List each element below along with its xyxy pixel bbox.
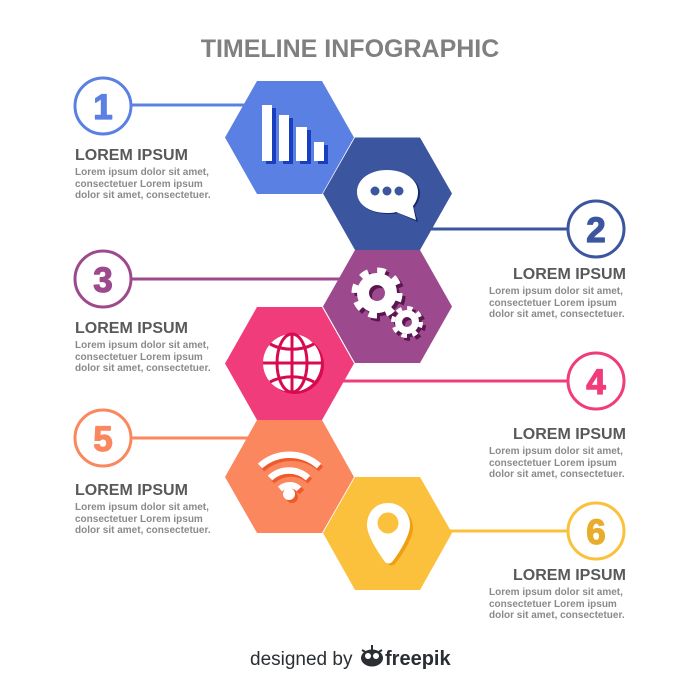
footer credit: designed by	[250, 649, 353, 670]
hexagon 2 with speech bubble icon	[323, 138, 452, 250]
text block 2: dolor sit amet, consectetuer.	[489, 309, 625, 320]
text block 6: dolor sit amet, consectetuer.	[489, 610, 625, 621]
text block 6: consectetuer Lorem ipsum	[489, 599, 617, 610]
text block 4: LOREM IPSUM	[513, 426, 626, 443]
text block 1	[75, 147, 211, 201]
text block 5	[75, 482, 211, 536]
text block 4: Lorem ipsum dolor sit amet,	[489, 446, 623, 457]
text block 5: LOREM IPSUM	[75, 482, 188, 499]
text block 1: Lorem ipsum dolor sit amet,	[75, 167, 209, 178]
text block 4	[489, 426, 626, 480]
step 2 connector and badge: 2	[586, 211, 606, 250]
title: TIMELINE INFOGRAPHIC	[201, 35, 499, 63]
text block 3: dolor sit amet, consectetuer.	[75, 363, 211, 374]
step 5 connector and badge: 5	[93, 420, 113, 459]
step 1 connector and badge	[75, 78, 250, 134]
text block 2: LOREM IPSUM	[513, 266, 626, 283]
text block 6: LOREM IPSUM	[513, 567, 626, 584]
footer credit: freepik	[385, 648, 451, 670]
step 1 connector and badge: 1	[93, 88, 113, 127]
step 3 connector and badge: 3	[93, 261, 113, 300]
hexagon 5 with wifi icon	[225, 420, 354, 533]
text block 3	[75, 320, 211, 374]
text block 2: Lorem ipsum dolor sit amet,	[489, 286, 623, 297]
hexagon 4 with globe icon	[225, 307, 354, 420]
hexagon 1 with bar chart icon	[225, 81, 354, 194]
hexagon 3 with gears icon	[323, 250, 452, 363]
step 5 connector and badge	[75, 410, 250, 466]
text block 5: consectetuer Lorem ipsum	[75, 514, 203, 525]
hexagon 6 with map pin icon	[323, 477, 452, 590]
step 6 connector and badge: 6	[586, 513, 606, 552]
text block 6	[489, 567, 626, 621]
step 2 connector and badge	[430, 201, 624, 257]
text block 3: LOREM IPSUM	[75, 320, 188, 337]
text block 2	[489, 266, 626, 320]
text block 6: Lorem ipsum dolor sit amet,	[489, 587, 623, 598]
text block 5: Lorem ipsum dolor sit amet,	[75, 502, 209, 513]
text block 4: dolor sit amet, consectetuer.	[489, 469, 625, 480]
text block 1: dolor sit amet, consectetuer.	[75, 190, 211, 201]
text block 5: dolor sit amet, consectetuer.	[75, 525, 211, 536]
text block 2: consectetuer Lorem ipsum	[489, 298, 617, 309]
text block 4: consectetuer Lorem ipsum	[489, 458, 617, 469]
text block 1: LOREM IPSUM	[75, 147, 188, 164]
step 6 connector and badge	[445, 503, 624, 559]
step 4 connector and badge	[340, 353, 624, 409]
text block 3: consectetuer Lorem ipsum	[75, 352, 203, 363]
text block 3: Lorem ipsum dolor sit amet,	[75, 340, 209, 351]
step 3 connector and badge	[75, 251, 345, 307]
footer credit	[250, 645, 451, 670]
text block 1: consectetuer Lorem ipsum	[75, 179, 203, 190]
step 4 connector and badge: 4	[586, 363, 606, 402]
